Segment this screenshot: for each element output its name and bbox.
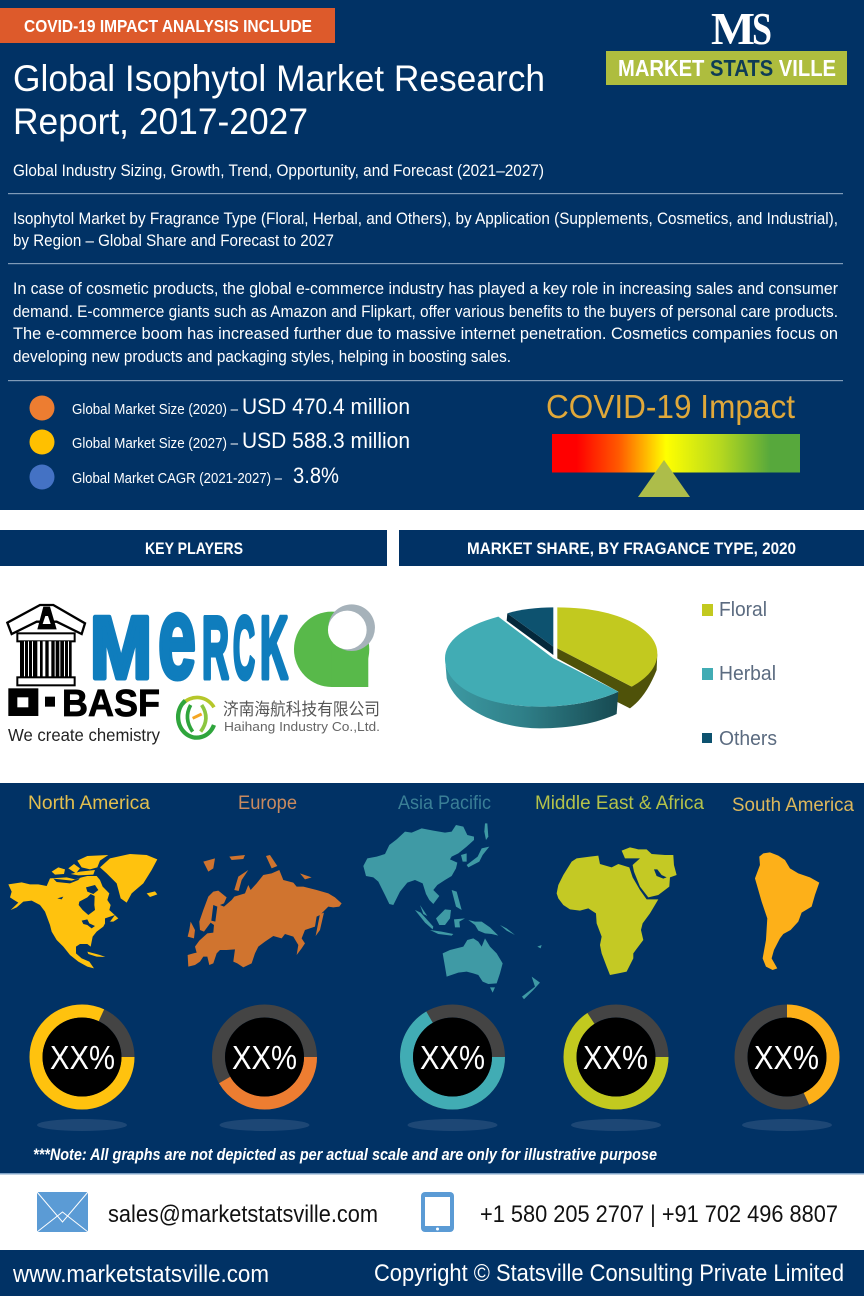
- donut: Middle East and Africa: XX%: [583, 1039, 648, 1076]
- donut: South America: XX%: [754, 1039, 819, 1076]
- heading bar: market share: MARKET SHARE, BY FRAGANCE TYPE, 2020: [467, 540, 796, 558]
- text block: description: In case of cosmetic products, the global e-commerce industry has played a key role in increasing sales and consumer: [13, 280, 838, 298]
- stat: CAGR: [30, 463, 339, 490]
- stat: market size 2027: [30, 428, 410, 454]
- logo: Merck: [90, 572, 288, 704]
- pie slice: others: [507, 607, 553, 655]
- legend: fragrance types: Herbal: [719, 663, 776, 685]
- text block: description: developing new products and packaging styles, helping in boosting sales.: [13, 348, 511, 366]
- region label: Asia Pacific: Asia Pacific: [398, 793, 491, 814]
- donut: Europe: [218, 1011, 310, 1131]
- legend: fragrance types: Others: [719, 728, 777, 750]
- title: Global Isophytol Market Research: [13, 58, 545, 99]
- banner: covid analysis: [0, 8, 335, 43]
- subtitle: Global Industry Sizing, Growth, Trend, Opportunity, and Forecast (2021–2027): [13, 162, 544, 180]
- icon: email envelope: [37, 1192, 88, 1232]
- stat: CAGR: 3.8%: [293, 463, 339, 488]
- panel: regions background: [0, 783, 864, 1173]
- pie slice: floral: [557, 607, 657, 708]
- logo: Market Stats Ville: MARKET STATS VILLE: [618, 55, 836, 81]
- region label: Middle East and Africa: Middle East & Africa: [535, 793, 704, 814]
- logo: Merck: M: [90, 598, 152, 697]
- region label: North America: North America: [28, 793, 150, 814]
- text block: description: [13, 280, 838, 366]
- legend: fragrance types: [702, 599, 777, 750]
- title: [13, 58, 545, 142]
- legend: fragrance types: Floral: [719, 599, 767, 621]
- stat: market size 2020: USD 470.4 million: [242, 394, 410, 419]
- logo: Haihang Industry: Haihang Industry Co.,Ltd.: [224, 720, 380, 734]
- text block: market segmentation: [13, 210, 838, 250]
- logo: Haihang Industry: 济南海航科技有限公司: [223, 700, 380, 719]
- map: South America: [755, 852, 819, 970]
- gauge: covid impact scale: [552, 434, 800, 497]
- chart: 3D pie market share: [445, 607, 657, 728]
- stat: CAGR: Global Market CAGR (2021-2027) –: [72, 471, 283, 487]
- map: Middle East and Africa: [557, 847, 677, 975]
- logo: Market Stats Ville: S: [752, 3, 772, 54]
- text block: description: The e-commerce boom has increased further due to massive internet penetration. Cosmetics companies focus on: [13, 325, 838, 343]
- map: North America: [8, 854, 157, 968]
- contact: email: sales@marketstatsville.com: [108, 1201, 378, 1228]
- stat: market size 2027: USD 588.3 million: [242, 428, 410, 453]
- panel: footer: [0, 1250, 864, 1296]
- heading bar: market share: [399, 530, 864, 566]
- stat: market size 2020: [30, 394, 410, 420]
- logo: Market Stats Ville: M: [711, 3, 755, 54]
- pie slice: herbal: [445, 617, 618, 728]
- logo: Merck: e: [158, 572, 196, 704]
- title: Report, 2017-2027: [13, 101, 308, 142]
- logo: green and grey mark: [294, 604, 375, 687]
- region label: South America: South America: [732, 795, 854, 816]
- note: illustrative scale: ***Note: All graphs are not depicted as per actual scale and are only for illustrative purpose: [33, 1145, 657, 1164]
- logo: BASF: We create chemistry: [8, 725, 160, 745]
- donut: South America: [741, 1011, 833, 1131]
- text block: market segmentation: by Region – Global Share and Forecast to 2027: [13, 232, 334, 250]
- donut: North America: [36, 1011, 128, 1131]
- logo: Haihang Industry: [178, 697, 380, 738]
- stat: market size 2020: Global Market Size (2020) –: [72, 402, 239, 418]
- logo: Merck: C: [233, 598, 255, 697]
- icon: phone: [421, 1192, 454, 1232]
- map: Europe: [188, 855, 342, 967]
- heading bar: key players: KEY PLAYERS: [145, 540, 243, 558]
- donut: Europe: XX%: [232, 1039, 297, 1076]
- logo: Merck: R: [202, 598, 229, 697]
- heading bar: key players: [0, 530, 387, 566]
- donut: Asia Pacific: XX%: [420, 1039, 485, 1076]
- logo: BASF: [7, 605, 160, 745]
- donut: North America: XX%: [50, 1039, 115, 1076]
- stat: market size 2027: Global Market Size (2027) –: [72, 436, 239, 452]
- panel: footer: www.marketstatsville.com: [12, 1261, 269, 1288]
- text: K: [260, 598, 288, 697]
- donut: Middle East and Africa: [570, 1011, 662, 1131]
- contact: phone numbers: +1 580 205 2707 | +91 702 496 8807: [480, 1201, 838, 1228]
- logo: Market Stats Ville: [606, 3, 847, 85]
- donut: Asia Pacific: [406, 1011, 498, 1131]
- panel: header background: [0, 0, 864, 510]
- logo: BASF: BASF: [62, 683, 160, 725]
- region label: Europe: Europe: [238, 793, 297, 814]
- map: Asia Pacific: [363, 823, 542, 999]
- heading: covid impact: COVID-19 Impact: [546, 388, 795, 425]
- banner: covid analysis: COVID-19 IMPACT ANALYSIS INCLUDE: [24, 16, 312, 36]
